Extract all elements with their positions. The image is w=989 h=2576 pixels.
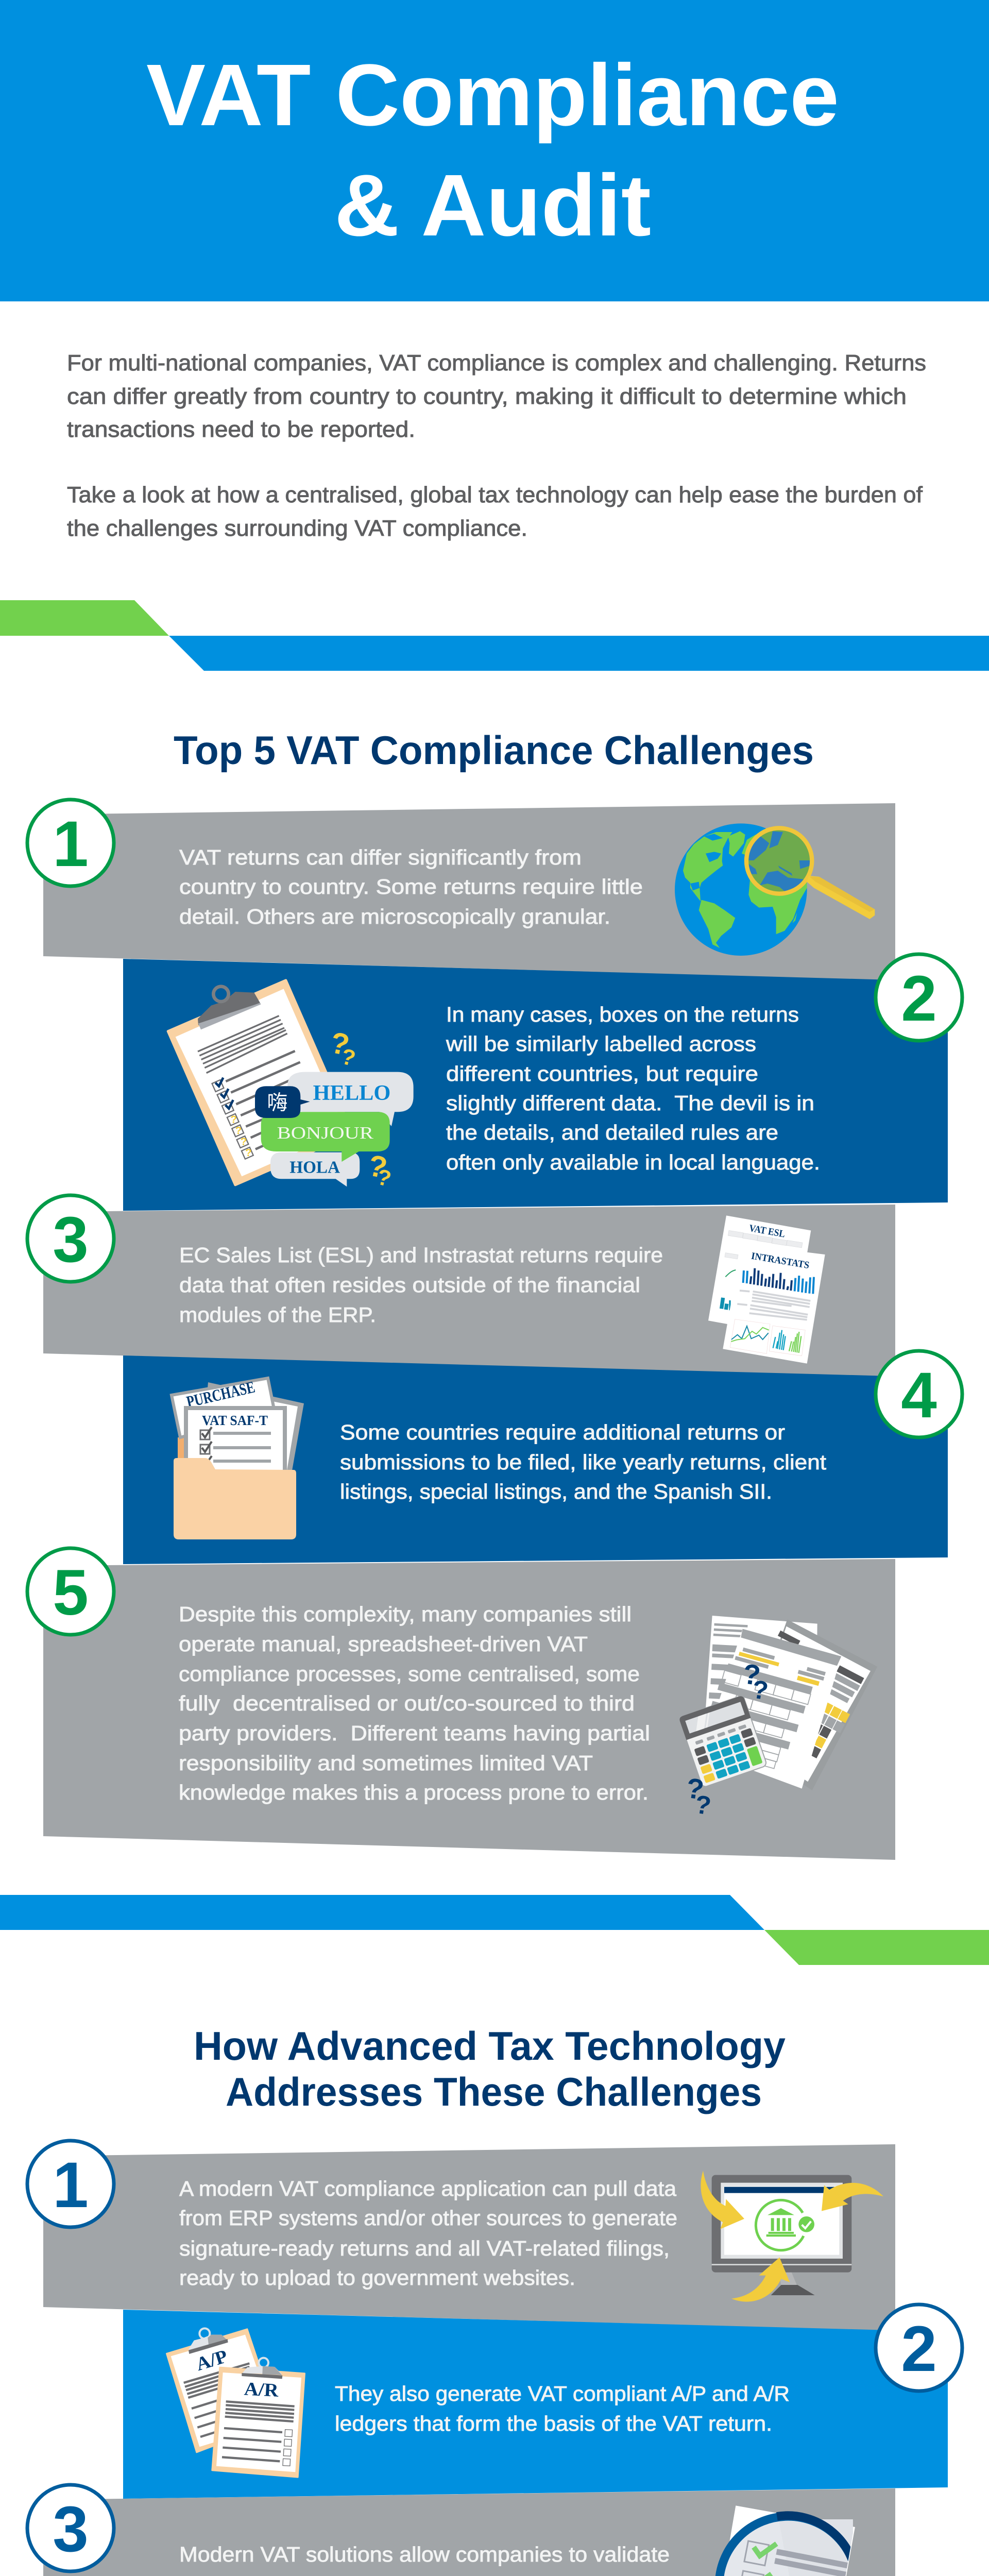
text: challenge 2	[446, 1003, 820, 1174]
badge 4	[876, 1351, 962, 1437]
badge 1: 1	[53, 2149, 89, 2221]
intro text: Take a look at how a centralised, global tax technology can help ease the burden of	[67, 482, 923, 507]
text: solution 1: signature-ready returns and all VAT-related filings,	[179, 2236, 670, 2260]
text: solution 2: ledgers that form the basis of the VAT return.	[335, 2412, 772, 2435]
ribbon divider top	[0, 600, 989, 671]
panel: challenge 1	[27, 800, 895, 980]
text: challenge 5: fully decentralised or out/co-sourced to third	[179, 1691, 635, 1715]
icon: A/P and A/R clipboards: A/P	[193, 2345, 230, 2375]
text: challenge 3: modules of the ERP.	[179, 1303, 376, 1327]
icon: clipboard and speech bubbles: ?	[245, 1147, 252, 1159]
text: challenge 5: compliance processes, some centralised, some	[179, 1662, 640, 1686]
text: challenge 2: In many cases, boxes on the returns	[446, 1003, 799, 1026]
icon: VAT ESL and Intrastats documents: INTRASTATS	[751, 1251, 810, 1271]
text: solution 1: ready to upload to government websites.	[179, 2266, 575, 2290]
badge 2	[876, 2304, 962, 2391]
icon: clipboard and speech bubbles	[168, 980, 414, 1192]
text: challenge 1: VAT returns can differ significantly from	[179, 845, 582, 869]
heading: how technology addresses challenges: How Advanced Tax Technology	[194, 2023, 786, 2069]
text: challenge 5: responsibility and sometimes limited VAT	[179, 1751, 593, 1775]
text: challenge 3	[179, 1243, 663, 1327]
text: challenge 1: country to country. Some returns require little	[179, 875, 643, 899]
panel: solution 1	[27, 2141, 895, 2331]
text: solution 2: They also generate VAT compliant A/P and A/R	[335, 2382, 790, 2405]
badge 3: 3	[53, 2494, 89, 2565]
badge 5: 5	[53, 1557, 89, 1629]
title	[146, 46, 839, 255]
text: challenge 5: knowledge makes this a process prone to error.	[179, 1781, 649, 1804]
intro text: can differ greatly from country to country, making it difficult to determine which	[67, 384, 907, 409]
badge 5	[27, 1548, 114, 1635]
icon: folder with documents: PURCHASE	[184, 1377, 257, 1411]
intro text	[67, 350, 926, 541]
heading: how technology addresses challenges: Addresses These Challenges	[226, 2069, 762, 2114]
panel: challenge 4	[123, 1351, 962, 1564]
text: challenge 2: will be similarly labelled across	[446, 1032, 756, 1056]
text: challenge 1	[179, 845, 643, 928]
badge 4: 4	[901, 1360, 937, 1431]
ribbon divider middle	[0, 1895, 989, 1965]
icon: folder with documents	[172, 1377, 304, 1539]
icon: globe with magnifier	[675, 823, 875, 956]
badge 1	[27, 800, 114, 886]
text: solution 1	[179, 2177, 677, 2290]
text: challenge 2: often only available in local language.	[446, 1150, 820, 1174]
badge 2: 2	[901, 2313, 937, 2385]
heading: how technology addresses challenges	[194, 2023, 786, 2114]
badge 1: 1	[53, 808, 89, 880]
badge 3	[27, 2485, 114, 2571]
icon: clipboard and speech bubbles: ?	[365, 1148, 390, 1185]
panel: challenge 3	[27, 1195, 895, 1377]
panel: solution 3	[27, 2485, 895, 2576]
badge 2	[876, 954, 962, 1041]
text: challenge 2: slightly different data. The devil is in	[446, 1091, 814, 1115]
panel: solution 2	[123, 2304, 962, 2499]
text: solution 3	[179, 2543, 670, 2576]
intro text: transactions need to be reported.	[67, 417, 415, 442]
icon: clipboard and speech bubbles: ?	[339, 1044, 358, 1071]
panel: challenge 5	[27, 1548, 895, 1860]
intro text: For multi-national companies, VAT compliance is complex and challenging. Returns	[67, 350, 926, 376]
icon: forms and calculator: ?	[693, 1790, 713, 1820]
icon: clipboard and speech bubbles: ?	[235, 1125, 242, 1137]
text: challenge 4: Some countries require additional returns or	[340, 1420, 785, 1444]
text: solution 2	[335, 2382, 790, 2435]
text: solution 1: A modern VAT compliance application can pull data	[179, 2177, 676, 2200]
heading: top 5 challenges: Top 5 VAT Compliance Challenges	[174, 727, 814, 773]
icon: magnifier over checklist	[710, 2505, 857, 2576]
text: challenge 4: submissions to be filed, like yearly returns, client	[340, 1450, 827, 1474]
icon: monitor with government building	[701, 2171, 883, 2302]
text: solution 1: from ERP systems and/or other sources to generate	[179, 2206, 677, 2230]
text: challenge 1: detail. Others are microscopically granular.	[179, 905, 610, 928]
text: challenge 5: operate manual, spreadsheet-driven VAT	[179, 1632, 588, 1656]
icon: clipboard and speech bubbles: ?	[241, 1136, 247, 1148]
icon: forms and calculator: ?	[741, 1657, 762, 1691]
icon: A/P and A/R clipboards: A/R	[244, 2378, 279, 2401]
panel: challenge 2	[123, 954, 962, 1211]
icon: VAT ESL and Intrastats documents	[708, 1215, 825, 1364]
title: & Audit	[334, 157, 651, 255]
text: challenge 3: data that often resides outside of the financial	[179, 1273, 640, 1297]
text: challenge 3: EC Sales List (ESL) and Instrastat returns require	[179, 1243, 663, 1267]
icon: forms and calculator	[678, 1616, 877, 1820]
text: challenge 2: different countries, but require	[446, 1062, 758, 1086]
icon: VAT ESL and Intrastats documents: VAT ESL	[748, 1223, 786, 1240]
text: challenge 5: Despite this complexity, many companies still	[179, 1602, 632, 1626]
text: solution 3: Modern VAT solutions allow companies to validate	[179, 2543, 670, 2566]
icon: clipboard and speech bubbles: ?	[328, 1026, 352, 1062]
icon: forms and calculator: ?	[684, 1772, 706, 1806]
badge 2: 2	[901, 963, 937, 1035]
text: challenge 4	[340, 1420, 827, 1503]
text: challenge 2: the details, and detailed rules are	[446, 1121, 778, 1144]
text: challenge 5: party providers. Different teams having partial	[179, 1721, 650, 1745]
icon: clipboard and speech bubbles: BONJOUR	[277, 1124, 374, 1143]
icon: forms and calculator: ?	[751, 1674, 770, 1705]
badge 1	[27, 2141, 114, 2227]
text: challenge 5	[179, 1602, 650, 1804]
icon: clipboard and speech bubbles: ?	[230, 1113, 237, 1125]
header banner	[0, 0, 989, 301]
icon: clipboard and speech bubbles: HELLO	[313, 1081, 390, 1105]
badge 3: 3	[53, 1204, 89, 1276]
icon: clipboard and speech bubbles: ?	[374, 1164, 394, 1192]
icon: folder with documents: VAT SAF-T	[202, 1413, 268, 1428]
icon: clipboard and speech bubbles: 嗨	[267, 1091, 287, 1114]
intro text: the challenges surrounding VAT compliance.	[67, 516, 527, 541]
icon: clipboard and speech bubbles: HOLA	[289, 1158, 340, 1177]
badge 3	[27, 1195, 114, 1282]
text: challenge 4: listings, special listings, and the Spanish SII.	[340, 1480, 772, 1503]
icon: A/P and A/R clipboards	[166, 2328, 305, 2477]
title: VAT Compliance	[146, 46, 839, 144]
